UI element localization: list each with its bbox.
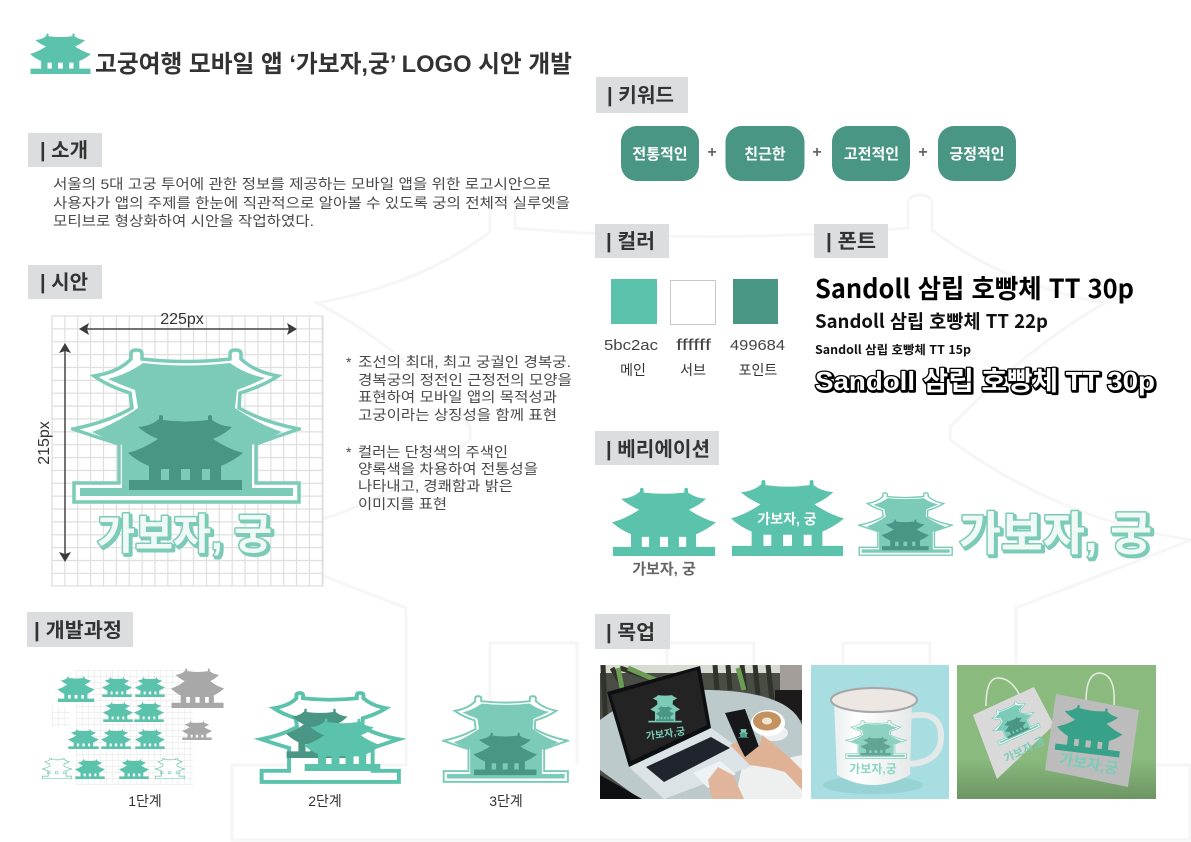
stage 2 label: 2단계 xyxy=(308,793,342,809)
notes: 나타내고, 경쾌함과 밝은 xyxy=(358,478,513,494)
keyword: friendly xyxy=(726,126,804,181)
mockup: enamel mug: 가보자,궁 xyxy=(849,761,897,776)
heading: draft xyxy=(28,265,102,299)
notes: 조선의 최대, 최고 궁궐인 경복궁. xyxy=(358,354,571,370)
logo grid diagram xyxy=(36,311,323,586)
font sample 30p: Sandoll 삼립 호빵체 TT 30p xyxy=(815,269,1134,306)
heading: development: | 개발과정 xyxy=(34,619,122,642)
panel: font xyxy=(814,224,1156,397)
heading: font: | 폰트 xyxy=(826,231,876,253)
font sample outlined: Sandoll 삼립 호빵체 TT 30p xyxy=(816,367,1156,397)
swatch: main: 메인 xyxy=(620,362,646,378)
width arrow xyxy=(79,323,297,335)
swatch: sub: 서브 xyxy=(680,362,706,378)
variation 3 xyxy=(859,493,1154,562)
background watermark: large palace outline xyxy=(232,195,1191,840)
notes: 고궁이라는 상징성을 함께 표현 xyxy=(358,407,557,423)
plus: + xyxy=(707,144,717,161)
swatch: point xyxy=(730,279,785,378)
plus: + xyxy=(812,144,822,161)
notes: 컬러는 단청색의 주색인 xyxy=(358,444,508,460)
bag right xyxy=(1045,673,1139,787)
logo wordmark: 가보자, 궁 xyxy=(99,513,274,560)
mockup: laptop and phone photo: 가보자,궁 xyxy=(645,724,686,743)
notes xyxy=(346,354,572,512)
variation 2 xyxy=(731,480,844,556)
keyword: classic: 고전적인 xyxy=(844,146,899,163)
main logo mark xyxy=(73,350,299,502)
font sample 22p: Sandoll 삼립 호빵체 TT 22p xyxy=(815,307,1048,334)
height arrow xyxy=(59,343,71,562)
heading: variations xyxy=(595,431,719,465)
height label: 215px xyxy=(36,421,53,465)
keyword: traditional: 전통적인 xyxy=(632,146,688,163)
icon: palace logo xyxy=(30,34,91,74)
intro text: 사용자가 앱의 주제를 한눈에 직관적으로 알아볼 수 있도록 궁의 전체적 실루엣을 xyxy=(53,195,570,211)
intro text: 서울의 5대 고궁 투어에 관한 정보를 제공하는 모바일 앱을 위한 로고시안으로 xyxy=(53,176,551,192)
panel: keywords xyxy=(596,77,1016,181)
swatch: main xyxy=(604,279,659,378)
notes: 표현하여 모바일 앱의 목적성과 xyxy=(358,389,557,405)
stage 1 sketches xyxy=(42,669,224,785)
panel: development process xyxy=(27,612,568,809)
bag left xyxy=(973,678,1054,779)
bag right: 가보자,궁 xyxy=(1058,751,1120,778)
mockup: shopping bags xyxy=(957,665,1156,799)
panel: colour xyxy=(595,224,785,378)
title text: 고궁여행 모바일 앱 ‘가보자,궁’ LOGO 시안 개발 xyxy=(95,51,572,78)
width label: 225px xyxy=(160,311,204,328)
notes: 양록색을 차용하여 전통성을 xyxy=(358,461,538,477)
heading: colour xyxy=(595,224,669,258)
heading: development xyxy=(27,612,133,647)
keyword: traditional xyxy=(621,126,699,181)
stage 3 label: 3단계 xyxy=(489,793,523,809)
logo wordmark: 가보자, 궁 xyxy=(97,511,272,558)
stage 3 final mark xyxy=(443,696,568,782)
notes: 이미지를 표현 xyxy=(358,496,447,512)
intro text xyxy=(53,176,570,229)
heading: keywords xyxy=(596,77,688,113)
swatch: main: 5bc2ac xyxy=(604,337,659,354)
keyword: positive: 긍정적인 xyxy=(949,146,1005,163)
keyword: positive xyxy=(938,126,1016,181)
panel: draft xyxy=(28,265,572,586)
heading: variations: | 베리에이션 xyxy=(606,438,710,461)
title xyxy=(30,34,572,78)
heading: mockups: | 목업 xyxy=(606,621,655,644)
swatch: point: 499684 xyxy=(730,337,785,354)
notes: * xyxy=(346,444,352,460)
keyword: friendly: 친근한 xyxy=(744,146,786,163)
heading: intro: | 소개 xyxy=(40,139,88,162)
variation 3: 가보자, 궁 xyxy=(959,508,1152,560)
keyword: classic xyxy=(832,126,910,181)
mockup: laptop and phone photo xyxy=(600,665,802,799)
heading: intro xyxy=(28,133,102,167)
intro text: 모티브로 형상화하여 시안을 작업하였다. xyxy=(53,213,314,229)
swatch: point: 포인트 xyxy=(739,362,777,378)
panel: mockups xyxy=(595,614,1156,799)
variation 3: 가보자, 궁 xyxy=(961,510,1154,562)
variation 1 xyxy=(612,488,716,578)
stage 2 overlap mark xyxy=(261,693,399,782)
bag left: 가보자,궁 xyxy=(1002,734,1047,765)
panel: variations xyxy=(595,431,1154,578)
heading: draft: | 시안 xyxy=(40,271,88,294)
heading: keywords: | 키워드 xyxy=(607,84,674,107)
swatch: sub: ffffff xyxy=(676,337,712,354)
heading: font xyxy=(814,224,888,258)
heading: mockups xyxy=(595,614,670,649)
panel: intro xyxy=(28,133,570,229)
variation 2: 가보자, 궁 xyxy=(757,511,817,527)
stage 1 label: 1단계 xyxy=(128,793,162,809)
heading: colour: | 컬러 xyxy=(606,230,655,253)
plus: + xyxy=(918,144,928,161)
variation 1: 가보자, 궁 xyxy=(632,561,696,578)
mockup: enamel mug xyxy=(811,665,949,799)
notes: * xyxy=(346,354,352,370)
notes: 경복궁의 정전인 근정전의 모양을 xyxy=(358,372,572,388)
swatch: sub xyxy=(670,280,716,378)
font sample 15p: Sandoll 삼립 호빵체 TT 15p xyxy=(815,341,971,358)
font sample outlined: Sandoll 삼립 호빵체 TT 30p xyxy=(815,366,1155,396)
